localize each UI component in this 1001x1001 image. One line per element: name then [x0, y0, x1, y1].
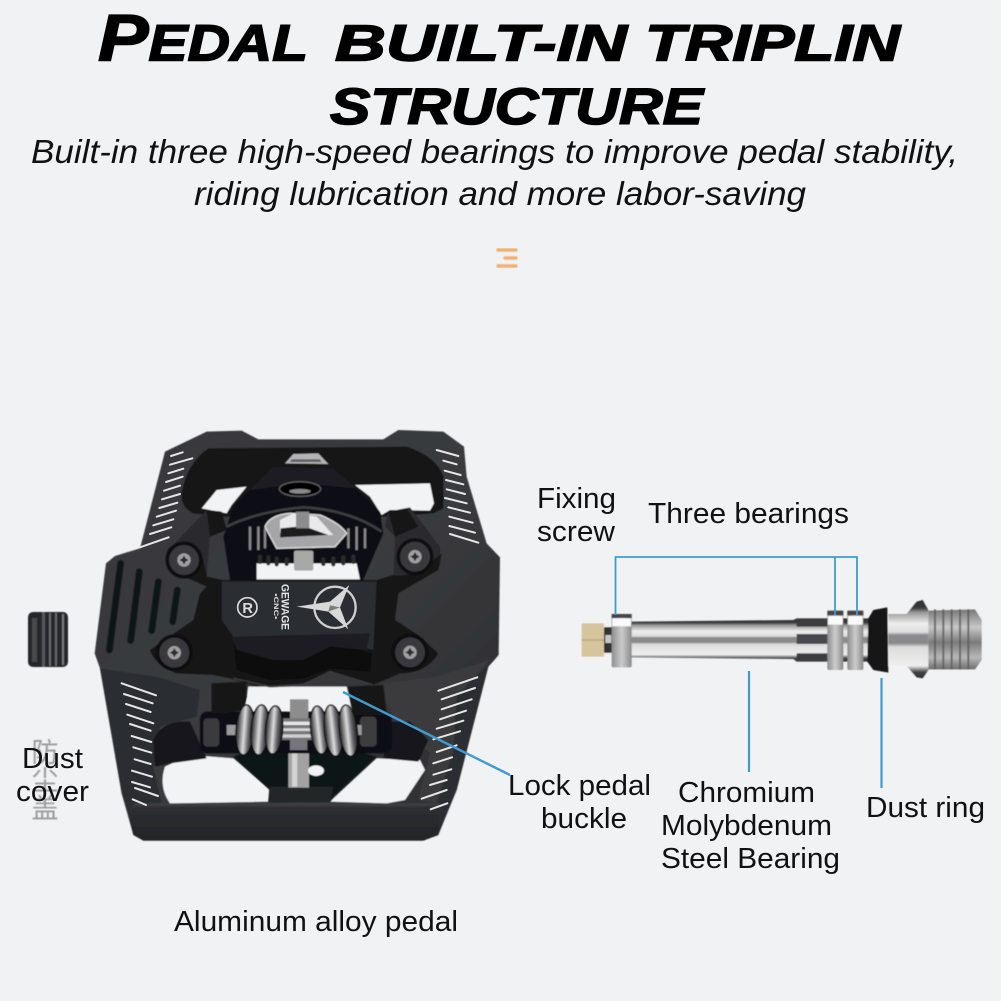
- chromium steel leader line: [748, 671, 750, 772]
- left raised grip bars: [109, 563, 177, 650]
- bottom window inner walls: [153, 722, 207, 767]
- screws: [158, 540, 432, 669]
- slots: bottom left: [122, 683, 158, 805]
- title: BUILT-IN: [335, 14, 629, 72]
- title: TRIPLIN: [645, 14, 901, 72]
- logo: brand text: [272, 584, 290, 630]
- three bearings label: Three bearings: [648, 498, 849, 530]
- bottom springs: [234, 704, 360, 757]
- faint chinese label: [32, 738, 58, 824]
- black seal ring: [867, 607, 888, 673]
- logo: registered mark: [238, 598, 257, 617]
- leader line: lock pedal buckle: [343, 692, 510, 775]
- slots: bottom right: [422, 677, 477, 809]
- left bearing: [612, 614, 632, 667]
- pedal: [95, 430, 500, 841]
- central plate frame: [150, 544, 442, 687]
- fixing screw label: screw: [537, 516, 616, 548]
- lock pedal buckle label: buckle: [541, 803, 627, 835]
- side arms top: [170, 510, 227, 577]
- collar: [888, 600, 928, 678]
- central plate: [222, 582, 377, 658]
- shaft: [630, 618, 870, 662]
- axle assembly: [582, 600, 982, 678]
- logo: registered mark: R: [242, 601, 253, 617]
- fixing screw label: Fixing: [537, 483, 616, 515]
- dust cover label: cover: [16, 776, 89, 808]
- chromium molybdenum steel bearing label: Steel Bearing: [661, 843, 840, 875]
- inner bearing two: [847, 611, 863, 670]
- threaded end: [928, 609, 982, 669]
- pedal body: [95, 430, 500, 841]
- chromium molybdenum steel bearing label: [661, 777, 840, 875]
- logo: brand text: GEWAGE: [278, 584, 290, 630]
- top recess: [181, 447, 443, 517]
- logo: brand text: •CNC•: [272, 593, 279, 620]
- top cleat plate: [265, 513, 347, 548]
- title: STRUCTURE: [330, 78, 705, 135]
- title: PEDAL: [98, 0, 308, 74]
- subtitle: [31, 133, 958, 212]
- subtitle: riding lubrication and more labor-saving: [194, 175, 807, 212]
- dust cover part: [28, 612, 68, 667]
- bottom window: [243, 687, 353, 717]
- title: [98, 0, 901, 135]
- faint chinese label: 防: [32, 738, 58, 768]
- bottom crossbar: [127, 803, 440, 841]
- bottom axle: [200, 712, 392, 753]
- logo: star emblem: [297, 585, 356, 629]
- slots: top left: [140, 452, 192, 547]
- slots: top right: [437, 450, 478, 543]
- lock pedal buckle label: [508, 770, 651, 835]
- lower side rails: [100, 668, 200, 835]
- dust ring label: Dust ring: [866, 792, 985, 824]
- lock pedal buckle label: Lock pedal: [508, 770, 651, 802]
- chromium molybdenum steel bearing label: Chromium: [678, 777, 815, 809]
- orange menu mark: [498, 250, 516, 266]
- faint chinese label: 盖: [32, 794, 58, 824]
- dust cover label: Dust: [22, 743, 83, 775]
- dust cover labels: [16, 738, 89, 824]
- top clip mechanism: [285, 453, 328, 464]
- inner bearing one: [827, 611, 843, 670]
- chromium molybdenum steel bearing label: Molybdenum: [661, 810, 832, 842]
- top white openings: [202, 487, 247, 513]
- dust cover label: [16, 743, 89, 808]
- fixing screw label: [537, 483, 616, 548]
- subtitle: Built-in three high-speed bearings to improve pedal stability,: [31, 133, 958, 170]
- bearing leader lines: [616, 557, 857, 615]
- brass nut: [582, 623, 604, 657]
- dust ring leader line: [880, 678, 883, 788]
- bottom clip mechanism: [200, 682, 392, 803]
- aluminum alloy pedal label: Aluminum alloy pedal: [174, 906, 458, 938]
- top opening below clip: [257, 563, 360, 579]
- top springs: [250, 527, 365, 550]
- faint chinese label: 尘: [32, 766, 58, 796]
